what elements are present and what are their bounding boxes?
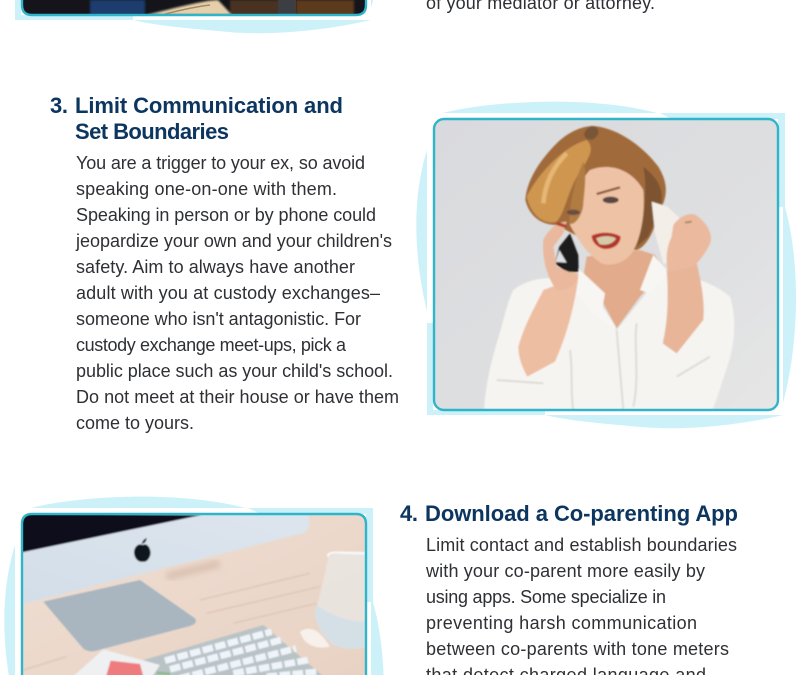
body text: section 3: speaking one-on-one with them.: [76, 179, 337, 199]
photo: upset woman on the phone: [434, 119, 778, 412]
tissue: [652, 202, 680, 263]
face: [570, 167, 644, 265]
left hand: [543, 222, 578, 290]
apple logo: [134, 544, 151, 562]
collar: [573, 268, 617, 328]
heading: section 3: Set Boundaries: [75, 119, 229, 144]
right forearm: [663, 263, 704, 353]
mouth: [592, 233, 621, 249]
body text: section 3: adult with you at custody exchanges–: [76, 283, 380, 303]
body text: section 4: with your co-parent more easily by: [425, 561, 705, 581]
glass: [317, 554, 365, 622]
heading: section 4: Download a Co-parenting App: [425, 501, 738, 526]
blob backdrop: section 4: [4, 497, 384, 675]
monitor stand: [43, 580, 196, 651]
photo frame: section 4: [22, 514, 366, 675]
body text: section 4: Limit contact and establish boundaries: [426, 535, 737, 555]
body text: section 3: custody exchange meet-ups, pick a: [76, 335, 347, 355]
keyboard base: [143, 625, 322, 675]
shirt folds: [497, 323, 710, 410]
body text: section 3: You are a trigger to your ex, so avoid: [76, 153, 365, 173]
body text: section 4: between co-parents with tone meters: [426, 639, 729, 659]
monitor body: [22, 513, 309, 604]
wood grain: [167, 563, 220, 577]
phone: [555, 233, 579, 272]
blob backdrop: section 3: [416, 102, 796, 428]
body text: section 4: [425, 535, 737, 675]
body text: section 3: [75, 153, 399, 433]
hair back: [525, 126, 666, 250]
body text: section 3: Do not meet at their house or have them: [76, 387, 399, 407]
body text: section 3: Speaking in person or by phone could: [76, 205, 376, 225]
body text: section 3: public place such as your child's school.: [76, 361, 393, 381]
left forearm: [518, 277, 578, 377]
image panel: woman on phone: [416, 102, 796, 428]
fist: [667, 214, 711, 272]
keyboard keys: [165, 632, 318, 675]
image panel: computer desk: [4, 497, 384, 675]
shirt body: [484, 272, 734, 412]
heading: section 3: [50, 93, 343, 144]
body text: section 4: using apps. Some specialize in: [426, 587, 666, 607]
golden fringe: [527, 140, 591, 222]
blob backdrop: section 2: [4, 0, 384, 33]
eye and brow: [603, 197, 619, 203]
heading: section 3: Limit Communication and: [75, 93, 343, 118]
table glare: [300, 629, 330, 648]
section 2 image: partial photo at top: [4, 0, 384, 33]
body text: section 3: safety. Aim to always have another: [76, 257, 355, 277]
photo: desk with monitor and keyboard: [22, 513, 367, 675]
body text: section 4: preventing harsh communication: [426, 613, 697, 633]
photo: dark room with objects: [22, 0, 366, 15]
photo frame: section 2: [22, 0, 366, 15]
body text: section 3: someone who isn't antagonistic. For: [76, 309, 361, 329]
body text: section 3: come to yours.: [76, 413, 194, 433]
body text: section 3: jeopardize your own and your children's: [75, 231, 392, 251]
photo frame: section 3: [434, 119, 778, 410]
black screen: [22, 513, 202, 552]
heading: section 4: 4.: [400, 501, 418, 526]
tablet: [73, 649, 160, 675]
neck and chest: [583, 250, 665, 328]
heading: section 3: 3.: [50, 93, 68, 118]
